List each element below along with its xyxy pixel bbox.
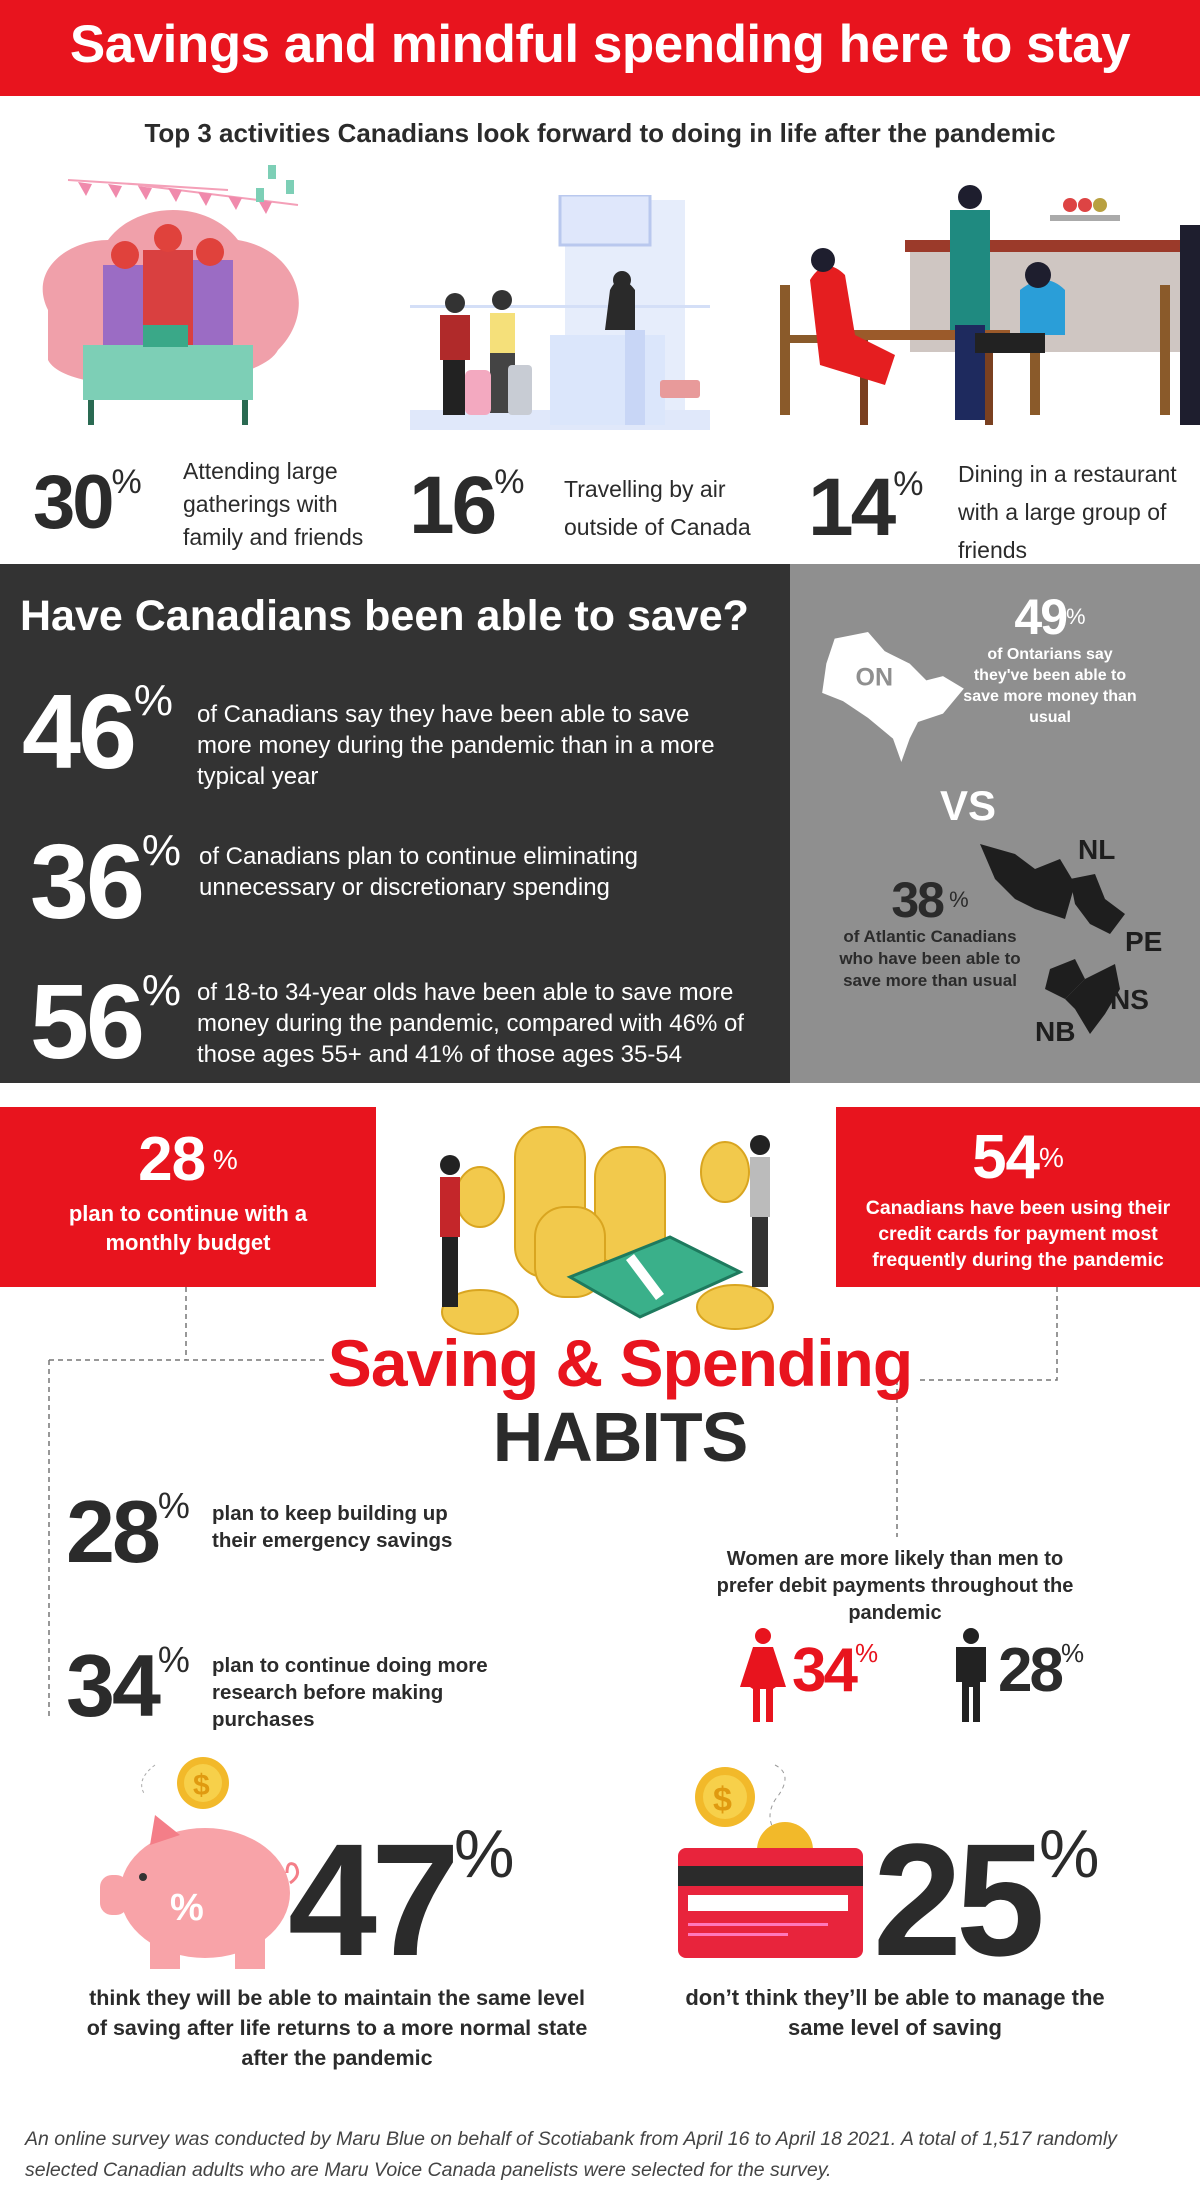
stat: women 34%: 34% bbox=[792, 1636, 878, 1705]
stat 38%: of Atlantic Canadians who have been able to save more than usual bbox=[839, 927, 1021, 990]
callout box: 54% credit cards: Canadians have been using their credit cards for payment most frequently during the pandemic bbox=[866, 1197, 1170, 1271]
stat 56%: 56% bbox=[30, 963, 181, 1081]
illustration: family gathering bbox=[42, 165, 299, 425]
stat 46% bbox=[22, 673, 715, 791]
illustration: restaurant bbox=[780, 185, 1200, 425]
callout box: 28% monthly budget bbox=[0, 1107, 376, 1287]
stat 46%: 46% bbox=[22, 673, 173, 791]
stat: 34% research: purchases bbox=[212, 1708, 315, 1731]
text: women vs men debit: Women are more likely than men to prefer debit payments throughout the pandemic bbox=[717, 1548, 1073, 1624]
stat 49%: of Ontarians say they've been able to save more money than usual bbox=[963, 646, 1137, 726]
dashed connector lines bbox=[48, 1287, 1058, 1716]
callout box: 54% credit cards bbox=[836, 1107, 1200, 1287]
stat 36% bbox=[30, 823, 638, 941]
map: Atlantic provinces: PE bbox=[1125, 926, 1162, 957]
stat: 16% travel: 16% bbox=[409, 460, 524, 551]
heading: Saving & Spending HABITS: Saving & Spending bbox=[328, 1326, 912, 1400]
stat 36%: 36% bbox=[30, 823, 181, 941]
map: Atlantic provinces bbox=[980, 839, 1162, 1047]
stat 56% bbox=[30, 963, 744, 1081]
panel: have Canadians been able to save bbox=[0, 564, 790, 1083]
footnote: An online survey was conducted by Maru Blue on behalf of Scotiabank from April 16 to April 18 2021. A total of 1,517 randomly selected Canadian adults who are Maru Voice Canada panelists were selected for the survey. bbox=[25, 2128, 1117, 2181]
stat: 47% maintain saving: 47% bbox=[288, 1810, 514, 1989]
stat: 34% research: research before making bbox=[212, 1681, 443, 1704]
icon: credit card with coins: $ bbox=[713, 1781, 732, 1819]
stat: 30% gatherings bbox=[33, 458, 363, 550]
stat 46%: of Canadians say they have been able to save more money during the pandemic than in a more typical year bbox=[197, 701, 715, 790]
illustration: coins and money bbox=[440, 1126, 774, 1335]
callout box: 28% monthly budget: plan to continue with a bbox=[69, 1201, 307, 1226]
stat: women 34% bbox=[740, 1628, 878, 1722]
stat: 14% dining: 14% bbox=[808, 462, 923, 553]
map: Ontario: ON bbox=[856, 663, 893, 691]
map: Atlantic provinces: NS bbox=[1110, 984, 1149, 1015]
vs label: VS bbox=[940, 782, 996, 829]
stat 56%: of 18-to 34-year olds have been able to save more money during the pandemic, compared with 46% of those ages 55+ and 41% of those ages 35-54 bbox=[197, 979, 744, 1068]
stat: 28% emergency savings: plan to keep building up bbox=[212, 1502, 448, 1525]
stat: 28% emergency savings: 28% bbox=[66, 1482, 190, 1581]
subtitle: Top 3 activities Canadians look forward to doing in life after the pandemic bbox=[144, 118, 1056, 148]
icon: credit card with coins bbox=[678, 1764, 863, 1958]
stat 49% bbox=[963, 589, 1137, 726]
stat: 16% travel: Travelling by air outside of Canada bbox=[564, 476, 751, 540]
stat: 30% gatherings: 30% bbox=[33, 460, 142, 545]
map: Atlantic provinces: NB bbox=[1035, 1016, 1075, 1047]
stat: 14% dining bbox=[808, 461, 1177, 563]
icon: piggy bank bbox=[100, 1757, 300, 1969]
icon: man bbox=[956, 1628, 986, 1722]
stat 36%: of Canadians plan to continue eliminating unnecessary or discretionary spending bbox=[199, 843, 638, 901]
stat: men 28%: 28% bbox=[998, 1636, 1084, 1705]
stat 38% bbox=[839, 872, 1021, 990]
stat: 25% won't manage: 25% bbox=[873, 1810, 1099, 1989]
stat 38%: 38 % bbox=[891, 872, 969, 928]
icon: piggy bank: $ bbox=[193, 1769, 210, 1802]
heading: Saving & Spending HABITS bbox=[328, 1326, 912, 1476]
stat 49%: 49% bbox=[1014, 589, 1086, 645]
map: Ontario bbox=[822, 632, 964, 762]
header banner bbox=[0, 0, 1200, 96]
stat: men 28% bbox=[956, 1628, 1084, 1722]
stat: 16% travel bbox=[409, 460, 751, 551]
icon: piggy bank: % bbox=[170, 1887, 204, 1929]
callout box: 54% credit cards: 54% bbox=[972, 1123, 1064, 1192]
stat: 34% research bbox=[66, 1636, 488, 1735]
stat: 14% dining: Dining in a restaurant with a large group of friends bbox=[958, 461, 1177, 563]
stat: 28% emergency savings bbox=[66, 1482, 452, 1581]
heading: Saving & Spending HABITS: HABITS bbox=[493, 1398, 747, 1476]
icon: woman bbox=[740, 1628, 786, 1722]
text: 25% caption: don’t think they’ll be able to manage the same level of saving bbox=[685, 1985, 1105, 2040]
title: Savings and mindful spending here to stay bbox=[70, 15, 1130, 74]
stat: 34% research: 34% bbox=[66, 1636, 190, 1735]
panel: Ontario vs Atlantic bbox=[790, 564, 1200, 1083]
text: 47% caption: think they will be able to maintain the same level of saving after life returns to a more normal state after the pandemic bbox=[87, 1986, 587, 2070]
callout box: 28% monthly budget: 28 % bbox=[138, 1125, 238, 1194]
stat: 28% emergency savings: their emergency savings bbox=[212, 1529, 452, 1552]
heading: Have Canadians been able to save? bbox=[20, 592, 749, 640]
stat: 34% research: plan to continue doing more bbox=[212, 1654, 488, 1677]
callout box: 28% monthly budget: monthly budget bbox=[106, 1230, 270, 1255]
illustration: airport check-in bbox=[410, 195, 710, 430]
stat: 30% gatherings: Attending large gatherings with family and friends bbox=[183, 458, 363, 550]
